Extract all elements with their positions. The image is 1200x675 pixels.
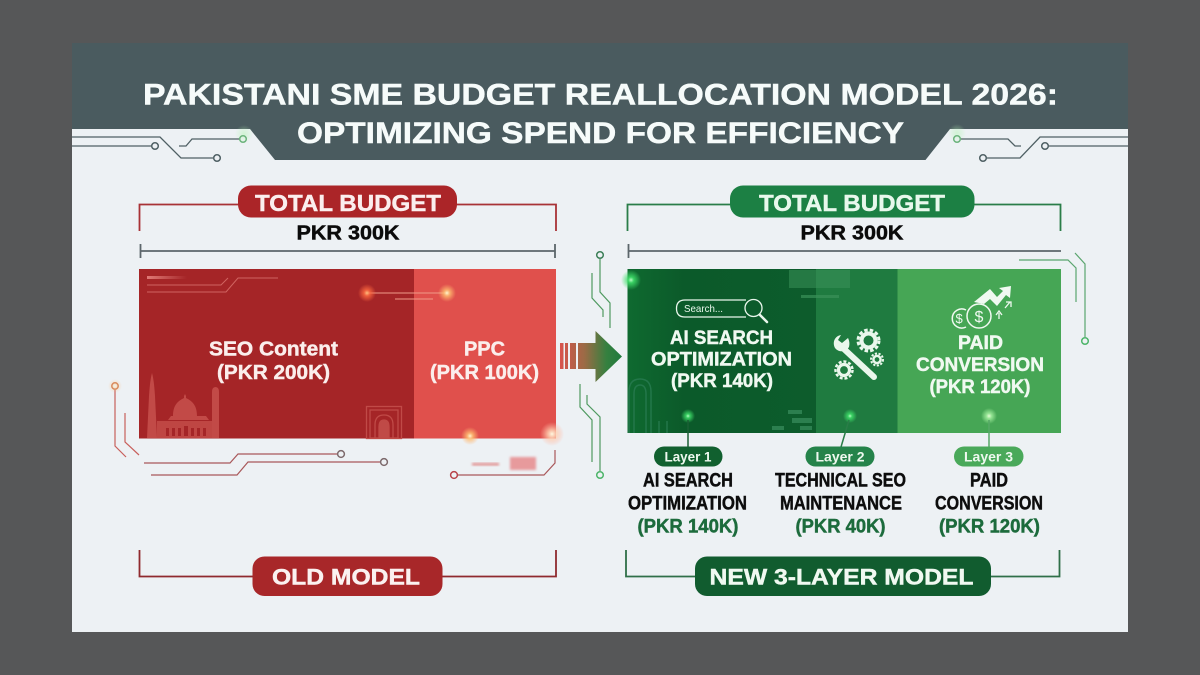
old model footer label — [140, 550, 556, 596]
icon: coins and growth arrow — [952, 286, 1011, 328]
label: PPC — [430, 338, 539, 384]
header circuit left — [72, 125, 253, 161]
new model dimension line — [628, 244, 1061, 258]
label: paid conversion — [916, 333, 1044, 398]
layer 1 column: (PKR 140K) — [638, 516, 738, 538]
old model dimension line — [140, 244, 555, 258]
new model footer label: NEW 3-LAYER MODEL — [710, 564, 974, 590]
icon: search bar — [676, 300, 767, 322]
layer 3 column: PAID — [970, 470, 1008, 492]
label: AI search optimization: (PKR 140K) — [671, 371, 773, 392]
panel accent — [789, 270, 850, 288]
old model total budget header: PKR 300K — [296, 222, 400, 244]
transition arrow — [560, 331, 622, 382]
new model footer label — [626, 550, 1060, 596]
layer 1 column: OPTIMIZATION — [628, 494, 747, 514]
label: paid conversion: (PKR 120K) — [930, 377, 1030, 398]
main canvas panel — [72, 43, 1128, 632]
label: SEO content — [209, 338, 338, 384]
title — [143, 78, 1058, 150]
layer 2 column: (PKR 40K) — [796, 516, 886, 538]
label: paid conversion: CONVERSION — [916, 355, 1044, 376]
new model total budget header: TOTAL BUDGET — [759, 190, 945, 216]
layer 3 column — [935, 446, 1043, 538]
layer 1 column: AI SEARCH — [643, 470, 733, 492]
label: AI search optimization: AI SEARCH — [670, 328, 773, 349]
icon: coins and growth arrow: $ — [956, 311, 964, 326]
header circuit right — [948, 124, 1128, 161]
circuit accents in bar — [147, 276, 278, 292]
decorative bricks — [772, 410, 812, 430]
layer 2 column: MAINTENANCE — [780, 494, 902, 514]
icon: faded arch — [629, 379, 667, 433]
label: paid conversion: PAID — [958, 333, 1003, 354]
layer 3 column: (PKR 120K) — [939, 516, 1040, 538]
title: OPTIMIZING SPEND FOR EFFICIENCY — [297, 117, 904, 150]
layer 2 column — [775, 446, 906, 538]
circuit traces left of old model — [108, 379, 139, 457]
icon: mosque silhouette — [147, 373, 219, 438]
layer 2 column: TECHNICAL SEO — [775, 470, 906, 492]
stacked bar: new model — [621, 269, 1061, 433]
icon: arch ornament — [366, 406, 402, 438]
layer 3 column: Layer 3 — [964, 450, 1013, 464]
circuit traces below old model — [144, 450, 555, 478]
segment: AI search optimization — [628, 269, 816, 433]
old model total budget header — [140, 186, 556, 244]
label: SEO content: (PKR 200K) — [217, 362, 330, 384]
connector lines to layers — [688, 420, 989, 447]
layer 2 column: Layer 2 — [816, 450, 864, 464]
circuit traces around arrow — [580, 252, 610, 478]
label: PPC: (PKR 100K) — [430, 362, 539, 384]
old model total budget header: TOTAL BUDGET — [255, 190, 441, 216]
label: AI search optimization — [651, 328, 792, 392]
new model total budget header: PKR 300K — [800, 222, 904, 244]
icon: coins and growth arrow: $ — [974, 309, 984, 326]
label: PPC: PPC — [464, 338, 505, 360]
stacked bar: old model — [139, 269, 564, 446]
segment: paid conversion — [898, 269, 1061, 433]
glow accents — [358, 284, 564, 446]
glow accents — [621, 270, 997, 424]
new model total budget header — [628, 186, 1060, 244]
layer 1 column — [628, 446, 747, 538]
icon: wrench and gears — [834, 330, 883, 378]
layer 3 column: CONVERSION — [935, 494, 1043, 514]
segment: PPC — [414, 269, 556, 438]
segment: SEO content — [139, 269, 414, 438]
layer 1 column: Layer 1 — [664, 450, 712, 464]
icon: search bar: Search... — [684, 303, 723, 315]
title: PAKISTANI SME BUDGET REALLOCATION MODEL 2026: — [143, 78, 1058, 112]
label: AI search optimization: OPTIMIZATION — [651, 350, 792, 370]
header banner — [72, 43, 1128, 160]
circuit traces right of new model — [1019, 253, 1088, 344]
old model footer label: OLD MODEL — [272, 564, 420, 590]
label: SEO content: SEO Content — [209, 338, 338, 360]
segment: technical SEO — [789, 269, 898, 433]
